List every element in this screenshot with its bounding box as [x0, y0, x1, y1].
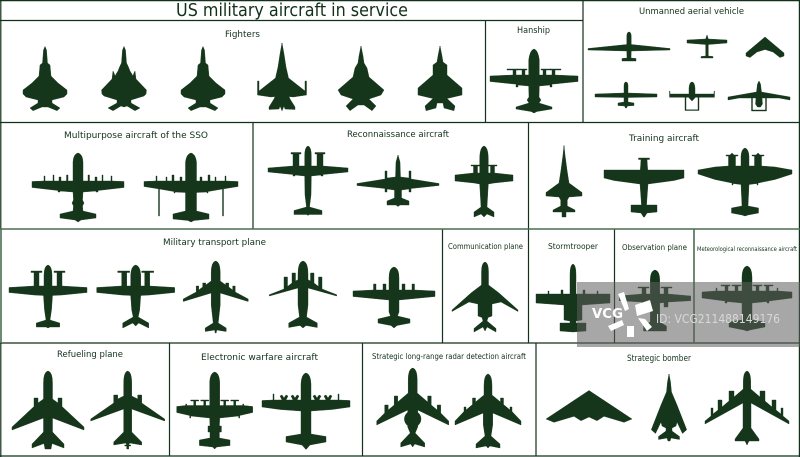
icon: swing-wing bomber [651, 374, 687, 441]
icon: fighter 1 [23, 46, 67, 111]
icon: weather aircraft [702, 266, 792, 331]
panel: refueling plane [12, 350, 165, 449]
heading: radar detection: Strategic long-range radar detection aircraft [372, 352, 526, 361]
watermark logo text: VCG [592, 306, 623, 322]
panel: unmanned aerial vehicle [588, 7, 790, 111]
icon: ew 1 [177, 372, 253, 449]
icon: airborne early warning aircraft [455, 374, 521, 448]
icon: sso 1 [32, 153, 124, 222]
icon: uav 3 [746, 37, 784, 58]
icon: ew 2 [262, 373, 350, 450]
icon: fighter 6 [418, 46, 462, 111]
panel: electronic warfare aircraft [177, 353, 350, 450]
icon: fighter 4 [258, 43, 306, 111]
panel: hanship [490, 26, 578, 113]
panel: strategic long-range radar detection aircraft [372, 352, 526, 448]
icon: trainer 2 [604, 158, 684, 217]
panel: observation plane [619, 243, 691, 331]
panel: communication plane [448, 242, 523, 332]
watermark id text: ID: VCG211488149176 [656, 312, 780, 326]
icon: trainer 1 [546, 146, 582, 217]
icon: uav 4 [595, 82, 657, 108]
panel: training aircraft [546, 134, 792, 217]
heading: training: Training aircraft [628, 134, 700, 144]
watermark [577, 282, 800, 347]
icon: uav 2 [687, 35, 727, 58]
icon: tanker 1 [12, 371, 84, 449]
icon: transport 2 [97, 265, 175, 328]
heading: bomber: Strategic bomber [627, 354, 691, 364]
panel: multipurpose aircraft of the SSO [32, 131, 238, 222]
heading: stormtrooper: Stormtrooper [548, 242, 599, 251]
panel: strategic bomber [546, 354, 789, 445]
panel: meteorological reconnaissance aircraft [697, 246, 798, 331]
icon: recon 1 [268, 146, 348, 216]
heading: uav: Unmanned aerial vehicle [639, 7, 744, 17]
heading: refueling: Refueling plane [57, 350, 123, 360]
heading: communication: Communication plane [448, 242, 523, 251]
panel: fighters [23, 30, 462, 111]
heading: hanship: Hanship [517, 26, 550, 36]
title: US military aircraft in service [176, 0, 408, 21]
icon: transport 4 [269, 261, 337, 328]
icon: transport 3 [183, 261, 248, 333]
heading: reconnaissance: Reconnaissance aircraft [347, 130, 450, 140]
heading: transport: Military transport plane [163, 238, 266, 248]
panel: stormtrooper [536, 242, 610, 332]
heading: observation: Observation plane [622, 243, 687, 252]
icon: recon 3 [455, 146, 513, 217]
icon: stealth bomber [546, 390, 632, 422]
panel: reconnaissance aircraft [268, 130, 513, 217]
panel: military transport plane [9, 238, 435, 333]
heading: electronic warfare: Electronic warfare aircraft [201, 353, 319, 363]
watermark burst icon [608, 292, 653, 337]
heading: multipurpose: Multipurpose aircraft of the SSO [64, 131, 208, 141]
icon: heavy bomber [705, 371, 789, 445]
icon: observation aircraft [619, 270, 691, 331]
icon: uav 6 [728, 81, 790, 111]
icon: attack aircraft [536, 264, 610, 332]
icon: fighter 5 [338, 46, 384, 111]
icon: transport 5 [353, 267, 435, 328]
icon: uav 1 [588, 32, 670, 61]
heading: fighters: Fighters [225, 30, 261, 40]
icon: awacs [377, 368, 449, 447]
icon: tanker 2 [91, 371, 165, 449]
icon: recon 2 [357, 155, 439, 206]
icon: fighter 3 [181, 46, 225, 111]
icon: trainer 3 [698, 148, 792, 216]
icon: fighter 2 [102, 46, 146, 111]
icon: sso 2 [144, 153, 238, 222]
icon: transport 1 [9, 265, 87, 328]
icon: communication plane [452, 262, 518, 332]
icon: uav 5 [670, 82, 714, 110]
icon: gunship [490, 49, 578, 113]
